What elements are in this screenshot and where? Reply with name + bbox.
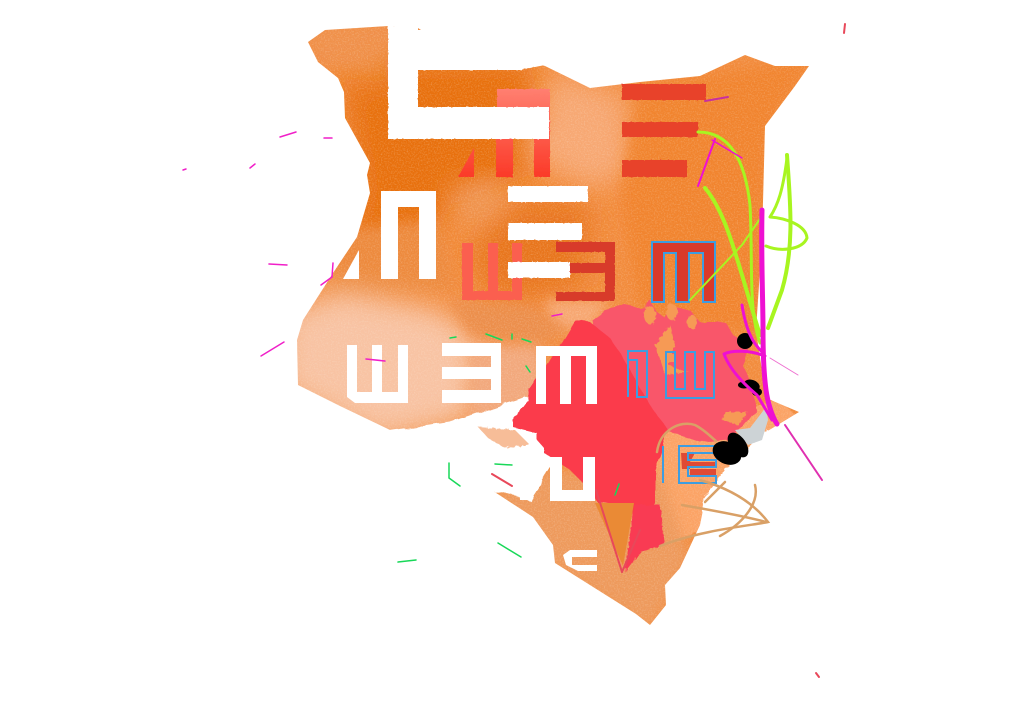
red letter m with blue outline bbox=[652, 242, 715, 302]
wash: north east orange bbox=[620, 60, 810, 335]
white speckled erased area bbox=[390, 397, 560, 500]
lime scribble bbox=[690, 132, 807, 343]
wash: dark orange central bbox=[470, 200, 590, 300]
white letter w, row four bbox=[347, 345, 408, 403]
white letter m, west bbox=[343, 191, 436, 279]
blue vertical stroke bbox=[662, 446, 664, 483]
wash: mid peach centre bbox=[470, 345, 545, 425]
green flecks bbox=[398, 334, 619, 562]
splash: pink red bbox=[592, 298, 756, 442]
splash: orange cut-outs bbox=[644, 304, 748, 425]
illustration: watercolour map of Kenya with eye chart letters bbox=[182, 23, 846, 678]
red flecks bbox=[492, 24, 845, 677]
wash: pale patch south of red E bbox=[545, 300, 610, 330]
salmon letter m, top bbox=[458, 89, 550, 177]
white letter E, row four bbox=[442, 343, 501, 403]
wash: light centre bbox=[450, 180, 510, 225]
blue outline letter E bbox=[679, 446, 716, 483]
wash: pale central north bbox=[520, 72, 630, 190]
white letter E, small bbox=[563, 550, 597, 571]
tan scribble bbox=[657, 424, 768, 546]
magenta scribble bbox=[698, 97, 822, 480]
wash: dark orange north west bbox=[340, 60, 545, 260]
paper grain bbox=[297, 26, 808, 624]
blue outline letter w bbox=[666, 352, 714, 398]
magenta flecks bbox=[183, 132, 562, 361]
wash: south bbox=[480, 470, 690, 630]
white letter w, row five bbox=[550, 457, 595, 501]
white letter E, centre bbox=[508, 186, 588, 278]
salmon letter w bbox=[462, 243, 522, 300]
black blots bbox=[709, 333, 762, 469]
map of Kenya: watercolour washes bbox=[297, 26, 809, 625]
wash: upper left lighter bbox=[310, 26, 388, 98]
orange streaked triangle bbox=[595, 503, 634, 566]
splash: drip south bbox=[625, 505, 665, 572]
wash: darker mottled central band bbox=[454, 300, 566, 341]
white letter E rotated, top left bbox=[388, 26, 549, 139]
wash: mid orange west bbox=[343, 212, 444, 265]
wash: pale south west bbox=[280, 290, 480, 440]
blue outline letter n bbox=[628, 351, 647, 397]
orange tint inside blue w bbox=[668, 354, 674, 362]
white letter fragment, row five bbox=[490, 457, 530, 500]
splash: bright red bbox=[513, 320, 668, 560]
wash: peach south east bbox=[656, 401, 794, 538]
white erased corner south east bbox=[700, 430, 830, 600]
red letter E, centre bbox=[556, 242, 615, 301]
orange remnant in speckled area bbox=[478, 427, 530, 448]
white letter m, row four bbox=[536, 346, 597, 404]
red letter E, top right bbox=[622, 84, 706, 177]
gray patch bbox=[735, 407, 768, 445]
